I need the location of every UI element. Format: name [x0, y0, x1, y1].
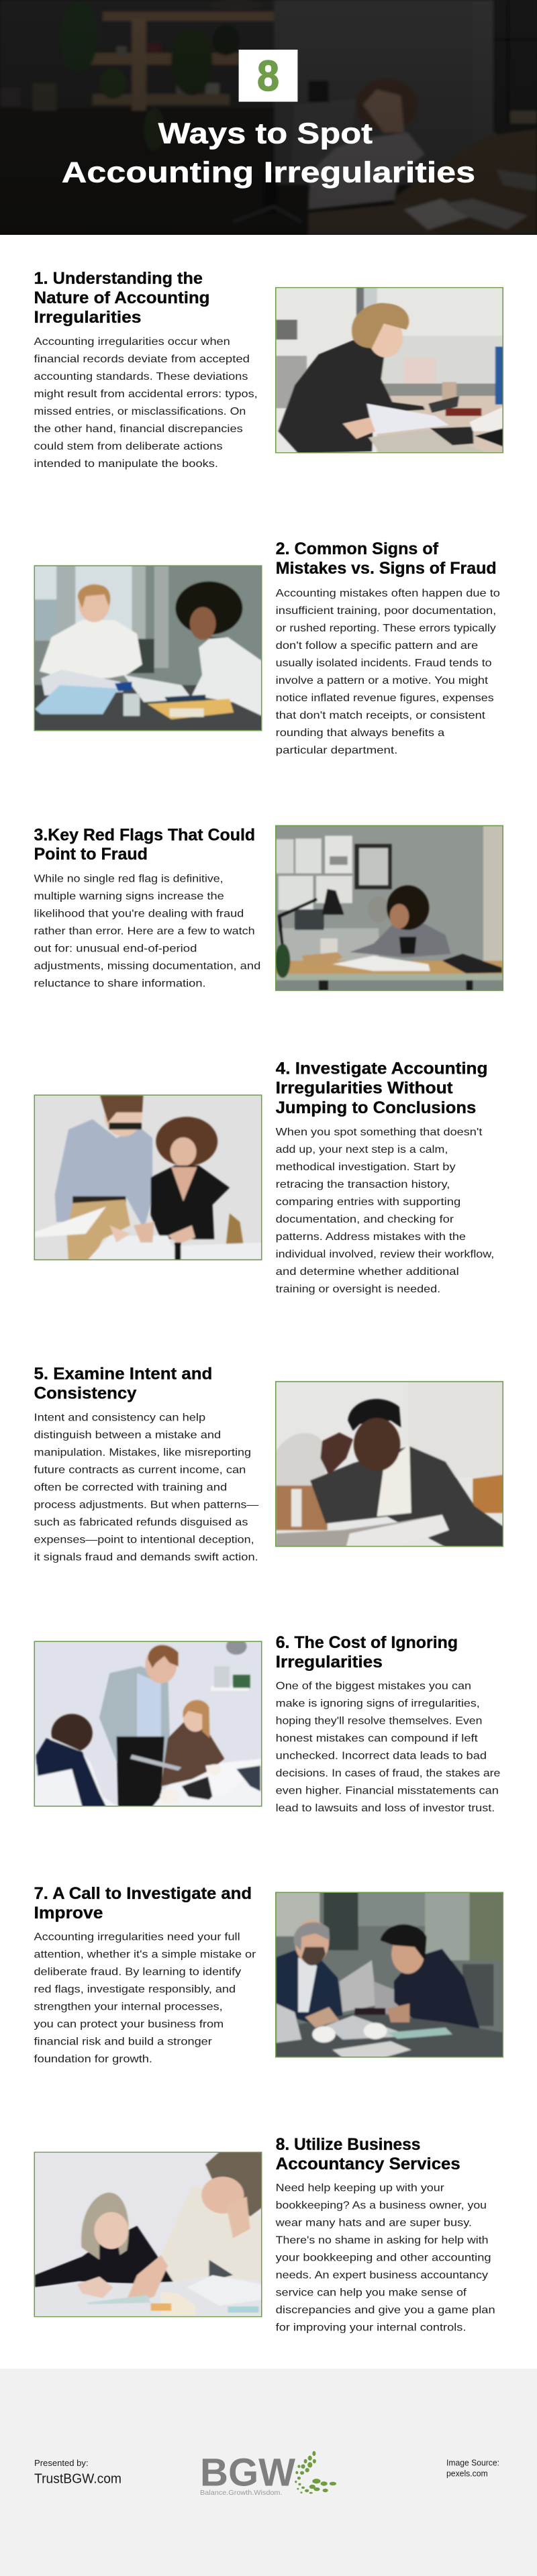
body text 1: could stem from deliberate actions: [34, 441, 223, 452]
logo: BGW: [200, 2451, 336, 2497]
heading 4: Irregularities Without: [276, 1079, 453, 1098]
body text 8: [275, 2182, 495, 2333]
body text 8: There's no shame in asking for help with: [276, 2234, 489, 2246]
body text 7: [34, 1931, 256, 2065]
heading 8: [276, 2135, 460, 2173]
photo: three colleagues in office: [34, 1641, 262, 1806]
body text 6: even higher. Financial misstatements can: [276, 1785, 499, 1796]
heading 4: [276, 1060, 487, 1117]
body text 3: reluctance to share information.: [34, 978, 206, 989]
title: [62, 117, 475, 189]
heading 7: 7. A Call to Investigate and: [34, 1884, 252, 1903]
image source: [446, 2458, 499, 2478]
body text 1: [34, 336, 258, 470]
body text 3: [34, 873, 260, 989]
panel: section 1: [34, 269, 503, 470]
body text 5: expenses—point to intentional deception,: [34, 1534, 254, 1546]
body text 5: future contracts as current income, can: [34, 1464, 246, 1476]
body text 6: One of the biggest mistakes you can: [276, 1680, 471, 1692]
body text 2: insufficient training, poor documentation,: [276, 605, 496, 617]
body text 2: notice inflated revenue figures, expenses: [276, 692, 494, 704]
heading 4: 4. Investigate Accounting: [276, 1060, 487, 1078]
body text 5: [34, 1412, 258, 1563]
heading 2: 2. Common Signs of: [276, 539, 439, 558]
body text 7: red flags, investigate responsibly, and: [34, 1983, 236, 1995]
number badge: [239, 50, 297, 102]
body text 8: needs. An expert business accountancy: [276, 2269, 488, 2281]
heading 5: [34, 1365, 212, 1402]
panel: section 4: [34, 1060, 494, 1295]
title: Ways to Spot: [158, 117, 373, 150]
panel: section 7: [34, 1884, 503, 2065]
body text 7: Accounting irregularities need your full: [34, 1931, 240, 1943]
photo: woman at desk with framed pictures: [275, 825, 503, 991]
body text 5: such as fabricated refunds disguised as: [34, 1516, 248, 1529]
body text 7: attention, whether it's a simple mistake or: [34, 1949, 256, 1960]
body text 2: [276, 588, 500, 756]
heading 7: [34, 1884, 252, 1922]
image source: pexels.com: [446, 2469, 488, 2478]
hero banner: [0, 0, 537, 235]
hero background photo: [0, 0, 537, 235]
photo: two businessmen at cafe table: [275, 1892, 503, 2057]
panel: section 3: [34, 825, 503, 991]
panel: section 2: [34, 539, 500, 756]
body text 1: might result from accidental errors: typos,: [34, 389, 258, 400]
photo: man reading with hand on forehead: [275, 1381, 503, 1547]
body text 4: and determine whether additional: [276, 1266, 459, 1278]
photo: two colleagues with binders: [34, 565, 262, 731]
body text 1: Accounting irregularities occur when: [34, 336, 230, 348]
body text 4: patterns. Address mistakes with the: [276, 1231, 466, 1243]
icon: leaf swirl: [295, 2451, 336, 2494]
heading 6: [276, 1633, 458, 1671]
body text 7: strengthen your internal processes,: [34, 2001, 223, 2012]
body text 8: wear many hats and are super busy.: [275, 2217, 472, 2228]
heading 2: Mistakes vs. Signs of Fraud: [276, 559, 497, 578]
body text 3: adjustments, missing documentation, and: [34, 960, 260, 972]
panel: section 5: [34, 1365, 503, 1563]
panel: section 8: [34, 2135, 495, 2333]
body text 1: intended to manipulate the books.: [34, 458, 218, 470]
body text 8: Need help keeping up with your: [276, 2182, 444, 2194]
presented by: TrustBGW.com: [34, 2472, 121, 2487]
panel: footer: [0, 2369, 537, 2576]
body text 7: deliberate fraud. By learning to identify: [34, 1966, 241, 1977]
body text 1: financial records deviate from accepted: [34, 354, 250, 365]
body text 8: service can help you make sense of: [276, 2287, 467, 2298]
body text 8: for improving your internal controls.: [276, 2322, 466, 2333]
heading 6: Irregularities: [276, 1653, 383, 1671]
body text 8: bookkeeping? As a business owner, you: [276, 2200, 487, 2211]
heading 1: Nature of Accounting: [34, 289, 209, 307]
photo: woman with calculator: [275, 287, 503, 454]
body text 6: decisions. In cases of fraud, the stakes are: [276, 1767, 501, 1779]
body text 3: multiple warning signs increase the: [34, 890, 224, 902]
body text 2: particular department.: [276, 745, 397, 756]
heading 4: Jumping to Conclusions: [276, 1098, 476, 1117]
body text 5: manipulation. Mistakes, like misreporting: [34, 1447, 251, 1459]
photo: two women reviewing papers: [34, 1094, 262, 1260]
image source: Image Source:: [446, 2458, 499, 2467]
logo: BGW: BGW: [200, 2451, 295, 2495]
body text 6: lead to lawsuits and loss of investor trust.: [276, 1802, 495, 1814]
body text 4: comparing entries with supporting: [276, 1196, 460, 1208]
body text 5: distinguish between a mistake and: [34, 1429, 221, 1441]
body text 5: it signals fraud and demands swift action.: [34, 1551, 258, 1563]
heading 3: [34, 826, 255, 864]
body text 8: your bookkeeping and other accounting: [276, 2252, 491, 2263]
body text 4: methodical investigation. Start by: [276, 1162, 456, 1173]
body text 7: financial risk and build a stronger: [34, 2036, 213, 2047]
body text 7: you can protect your business from: [34, 2018, 224, 2030]
heading 8: Accountancy Services: [276, 2155, 460, 2173]
body text 1: missed entries, or misclassifications. On: [34, 406, 246, 417]
heading 7: Improve: [34, 1904, 103, 1922]
body text 6: hoping they'll resolve themselves. Even: [276, 1715, 482, 1727]
title: Accounting Irregularities: [62, 156, 475, 189]
body text 4: When you spot something that doesn't: [276, 1127, 483, 1138]
body text 3: out for: unusual end-of-period: [34, 943, 197, 954]
body text 2: involve a pattern or a motive. You might: [276, 675, 489, 686]
body text 2: usually isolated incidents. Fraud tends to: [276, 658, 492, 669]
body text 6: unchecked. Incorrect data leads to bad: [276, 1750, 487, 1761]
presented by: Presented by:: [34, 2458, 89, 2468]
body text 5: Intent and consistency can help: [34, 1412, 205, 1424]
heading 5: Consistency: [34, 1384, 137, 1402]
heading 5: 5. Examine Intent and: [34, 1365, 212, 1384]
presented by: [34, 2458, 121, 2487]
body text 1: the other hand, financial discrepancies: [34, 423, 243, 435]
heading 1: [34, 269, 209, 327]
body text 4: [276, 1127, 494, 1295]
body text 2: that don't match receipts, or consistent: [276, 710, 486, 721]
heading 6: 6. The Cost of Ignoring: [276, 1633, 458, 1652]
body text 1: accounting standards. These deviations: [34, 371, 248, 382]
body text 4: documentation, and checking for: [276, 1214, 454, 1225]
body text 8: discrepancies and give you a game plan: [276, 2304, 495, 2316]
body text 7: foundation for growth.: [34, 2053, 152, 2065]
heading 3: 3.Key Red Flags That Could: [34, 826, 255, 845]
body text 4: add up, your next step is a calm,: [276, 1144, 448, 1155]
body text 3: While no single red flag is definitive,: [34, 873, 224, 884]
body text 2: rounding that always benefits a: [276, 727, 444, 739]
body text 2: or rushed reporting. These errors typically: [276, 623, 496, 634]
body text 2: Accounting mistakes often happen due to: [276, 588, 500, 599]
body text 5: often be corrected with training and: [34, 1482, 227, 1494]
body text 6: [276, 1680, 501, 1814]
body text 3: likelihood that you're dealing with fraud: [34, 908, 244, 919]
body text 6: make is ignoring signs of irregularities,: [276, 1698, 480, 1709]
heading 2: [276, 539, 497, 578]
panel: section 6: [34, 1633, 501, 1814]
heading 1: 1. Understanding the: [34, 269, 203, 288]
body text 3: rather than error. Here are a few to watch: [34, 925, 255, 937]
heading 3: Point to Fraud: [34, 845, 148, 864]
body text 2: don't follow a specific pattern and are: [276, 640, 478, 652]
body text 4: training or oversight is needed.: [276, 1284, 440, 1295]
photo: woman and man pointing at tablet: [34, 2151, 262, 2318]
body text 5: process adjustments. But when patterns—: [34, 1499, 258, 1511]
heading 8: 8. Utilize Business: [276, 2135, 420, 2154]
number badge: 8: [257, 52, 279, 100]
logo: BGW: Balance.Growth.Wisdom.: [200, 2489, 282, 2497]
body text 6: honest mistakes can compound if left: [276, 1733, 478, 1744]
body text 4: individual involved, review their workflow,: [276, 1249, 494, 1260]
body text 4: retracing the transaction history,: [276, 1179, 450, 1190]
heading 1: Irregularities: [34, 308, 141, 327]
